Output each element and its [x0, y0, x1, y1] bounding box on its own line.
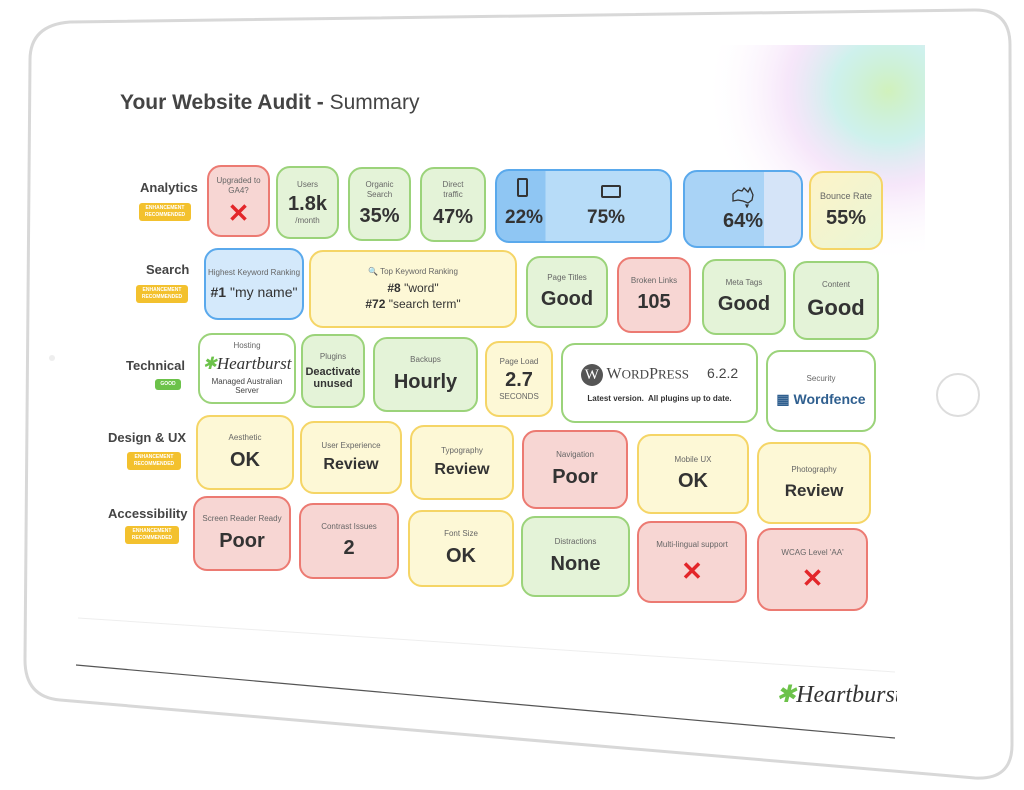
- card: GA4: [207, 165, 270, 237]
- badge: search: [136, 285, 188, 303]
- card: page titles: Good: [541, 288, 593, 310]
- card: aesthetic: [196, 415, 294, 490]
- card: hosting: ✱Heartburst: [203, 354, 291, 373]
- card: backups: Backups: [410, 355, 441, 364]
- card: content: Content: [822, 280, 850, 289]
- row label: Analytics: Analytics: [140, 180, 198, 195]
- card: contrast: [299, 503, 399, 579]
- card: direct: Direct: [443, 180, 463, 189]
- badge: search: RECOMMENDED: [142, 294, 182, 300]
- card: hosting: Managed Australian Server: [212, 377, 282, 395]
- card: users: Users: [297, 180, 318, 189]
- card: page load: 2.7: [505, 368, 533, 390]
- row label: Search: Search: [146, 262, 189, 277]
- card: photography: Review: [785, 481, 843, 500]
- card: users: [276, 166, 339, 239]
- card: plugins: unused: [313, 378, 353, 390]
- card: wcag: ✕: [802, 563, 823, 593]
- card: distractions: [521, 516, 630, 597]
- card: hosting: [198, 333, 296, 404]
- card: mobile ux: OK: [678, 470, 708, 492]
- card: australia: 64%: [723, 210, 763, 232]
- card: users: 1.8k: [288, 192, 327, 214]
- card: wordpress: WORDPRESS 6.2.2: [606, 365, 738, 382]
- card: devices: 75%: [587, 207, 625, 228]
- title: Your Website Audit - Summary: [120, 91, 419, 114]
- card: GA4: ✕: [228, 198, 249, 228]
- row label: Accessibility: Accessibility: [108, 506, 188, 521]
- card: broken links: Broken Links: [631, 276, 677, 285]
- card: highest keyword: Highest Keyword Ranking: [208, 268, 300, 277]
- badge: analytics: RECOMMENDED: [145, 212, 185, 218]
- card: contrast: Contrast Issues: [321, 522, 377, 531]
- card: font size: [408, 510, 514, 587]
- card: screen reader: [193, 496, 291, 571]
- badge: accessibility: [125, 526, 179, 544]
- card: contrast: 2: [343, 537, 355, 559]
- card: organic: Search: [367, 190, 392, 198]
- card: bounce: [809, 171, 883, 250]
- card: backups: [373, 337, 478, 412]
- card: australia: [683, 170, 803, 248]
- card: bounce: Bounce Rate: [820, 191, 872, 201]
- card: broken links: 105: [637, 291, 671, 313]
- card: screen reader: Screen Reader Ready: [202, 514, 282, 523]
- card: devices: [495, 169, 672, 243]
- card: bounce: 55%: [826, 207, 866, 229]
- card: typography: Typography: [441, 446, 483, 455]
- card: page load: Page Load: [500, 357, 538, 366]
- card: meta tags: [702, 259, 786, 335]
- badge: design: RECOMMENDED: [134, 461, 174, 467]
- card: direct: traffic: [443, 190, 463, 199]
- card: hosting: Hosting: [233, 341, 261, 350]
- card: backups: Hourly: [394, 371, 457, 393]
- card: plugins: Deactivate: [305, 366, 361, 378]
- card: multilingual: [637, 521, 747, 603]
- card: mobile ux: Mobile UX: [675, 455, 711, 464]
- card: top keyword: 🔍 Top Keyword Ranking: [368, 267, 458, 276]
- card: wordpress: W: [585, 366, 599, 382]
- badge: analytics: [139, 203, 191, 221]
- card: aesthetic: Aesthetic: [229, 433, 261, 442]
- card: content: [793, 261, 879, 340]
- card: page load: SECONDS: [499, 392, 539, 400]
- card: aesthetic: OK: [230, 449, 260, 471]
- card: top keyword: #72 "search term": [365, 297, 461, 311]
- card: font size: Font Size: [444, 529, 478, 538]
- badge: analytics: ENHANCEMENT: [146, 205, 184, 211]
- card: typography: [410, 425, 514, 500]
- card: broken links: [617, 257, 691, 333]
- card: page titles: Page Titles: [547, 273, 587, 282]
- card: plugins: Plugins: [320, 352, 346, 361]
- card: top keyword: [309, 250, 517, 328]
- badge: accessibility: ENHANCEMENT: [133, 528, 171, 534]
- card: security: ▦ Wordfence: [776, 391, 866, 407]
- card: plugins: [301, 334, 365, 408]
- badge: design: [127, 452, 181, 470]
- card: wcag: WCAG Level 'AA': [781, 548, 844, 557]
- card: wordpress: Latest version. All plugins up to date.: [587, 394, 732, 402]
- card: organic: Organic: [365, 180, 394, 189]
- card: multilingual: ✕: [681, 556, 703, 586]
- card: user experience: [300, 421, 402, 494]
- card: page load: [485, 341, 553, 417]
- card: distractions: Distractions: [555, 537, 596, 546]
- card: screen reader: Poor: [219, 530, 265, 552]
- card: navigation: [522, 430, 628, 509]
- card: GA4: Upgraded to: [216, 176, 261, 185]
- card: user experience: Review: [323, 456, 379, 473]
- badge: search: ENHANCEMENT: [143, 287, 181, 293]
- card: navigation: Poor: [552, 466, 598, 488]
- card: meta tags: Good: [718, 293, 770, 315]
- card: organic: 35%: [359, 205, 400, 227]
- card: security: [766, 350, 876, 432]
- card: GA4: GA4?: [228, 186, 249, 195]
- card: user experience: User Experience: [321, 441, 381, 450]
- badge: technical: GOOD: [160, 381, 176, 387]
- card: users: /month: [295, 216, 320, 224]
- card: content: Good: [807, 295, 865, 320]
- card: highest keyword: #1 "my name": [210, 284, 297, 300]
- card: top keyword: #8 "word": [387, 281, 439, 295]
- card: wordpress: [561, 343, 758, 423]
- card: highest keyword: [204, 248, 304, 320]
- badge: technical: [155, 379, 181, 390]
- row label: Design & UX: Design & UX: [108, 430, 186, 445]
- card: mobile ux: [637, 434, 749, 514]
- card: organic: [348, 167, 411, 241]
- card: navigation: Navigation: [556, 450, 594, 459]
- card: direct: 47%: [433, 206, 473, 228]
- card: typography: Review: [434, 461, 490, 478]
- card: meta tags: Meta Tags: [726, 278, 762, 287]
- badge: design: ENHANCEMENT: [135, 454, 173, 460]
- badge: accessibility: RECOMMENDED: [132, 535, 172, 541]
- row label: Technical: Technical: [126, 358, 185, 373]
- card: wcag: [757, 528, 868, 611]
- card: security: Security: [807, 374, 835, 383]
- card: distractions: None: [550, 553, 600, 575]
- card: photography: Photography: [791, 465, 837, 474]
- card: direct: [420, 167, 486, 242]
- card: font size: OK: [446, 545, 476, 567]
- card: page titles: [526, 256, 608, 328]
- card: devices: 22%: [505, 207, 543, 228]
- card: photography: [757, 442, 871, 524]
- card: multilingual: Multi-lingual support: [656, 540, 728, 549]
